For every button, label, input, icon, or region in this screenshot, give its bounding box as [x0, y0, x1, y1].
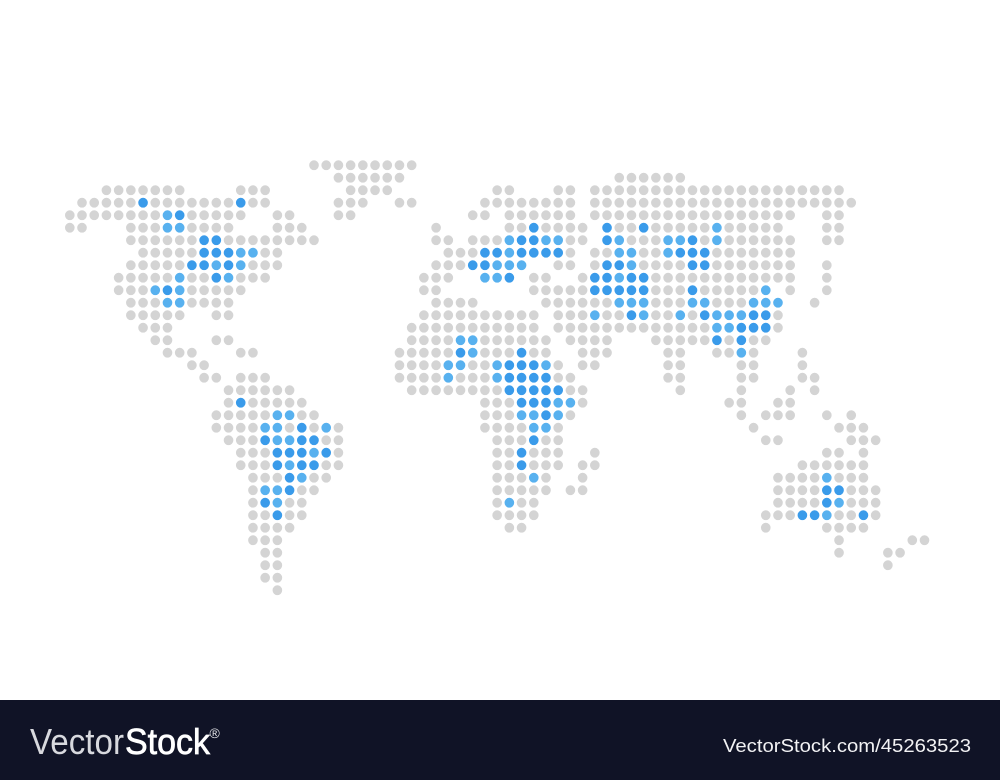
region: North America dots	[70, 190, 314, 378]
region: Africa dots	[399, 303, 595, 528]
dotted world map	[70, 165, 925, 590]
logo: VectorStock wordmark	[30, 721, 220, 762]
footer bar	[0, 700, 1000, 780]
logo: VectorStock wordmark: ®	[210, 725, 220, 741]
region: South America dots	[216, 378, 339, 590]
logo: VectorStock wordmark: Stock	[125, 721, 211, 762]
region: Eurasia dots	[424, 178, 851, 390]
region: Greenland dots	[314, 165, 412, 215]
logo: VectorStock wordmark: Vector	[30, 721, 124, 762]
image reference text: VectorStock.com/45263523	[723, 736, 971, 756]
region: Southeast Asia and Oceania dots	[729, 403, 925, 565]
